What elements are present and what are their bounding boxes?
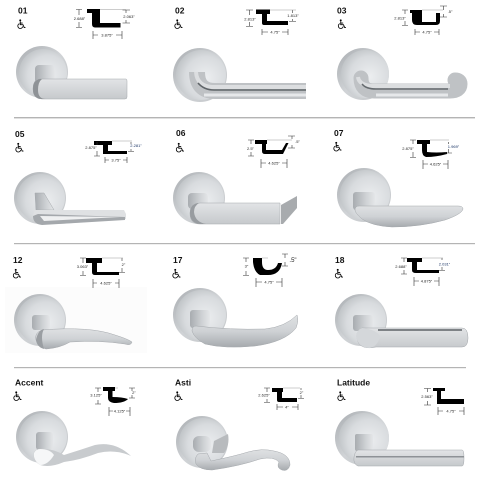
- heading: 02: 02: [175, 6, 185, 16]
- heading: 18: 18: [335, 255, 345, 265]
- profile diagram 05: 3.75": [111, 158, 121, 162]
- profile diagram 17: [243, 254, 297, 287]
- heading: Asti: Asti: [175, 378, 191, 388]
- profile diagram 12: [77, 258, 126, 288]
- profile diagram 12: 2": [122, 262, 126, 267]
- profile diagram 01: [74, 9, 135, 39]
- door lever Asti: [176, 416, 290, 470]
- door lever 18: [335, 294, 468, 348]
- heading: Accent: Accent: [15, 378, 44, 388]
- panel: lever 17: [173, 254, 298, 347]
- profile diagram 02: 1.813": [287, 13, 299, 18]
- heading: 17: 17: [173, 255, 183, 265]
- profile diagram 07: 4.625": [430, 162, 442, 166]
- profile diagram 07: 2.875": [402, 146, 414, 151]
- door lever Accent: [16, 411, 131, 466]
- door lever 02: [173, 48, 306, 102]
- profile diagram 07: [402, 140, 460, 169]
- profile diagram Latitude: 2.563": [421, 394, 433, 399]
- icon: accessible: [176, 143, 184, 152]
- profile diagram 17: 3": [245, 264, 249, 268]
- icon: accessible: [338, 19, 346, 28]
- icon: accessible: [14, 391, 21, 400]
- profile diagram Asti: 2": [300, 390, 304, 395]
- profile diagram Accent: [90, 387, 136, 416]
- profile diagram Accent: 4.125": [114, 408, 126, 414]
- heading: 07: 07: [334, 128, 344, 138]
- heading: 01: 01: [18, 6, 28, 16]
- profile diagram 02: [244, 10, 299, 35]
- profile diagram 12: 3.063": [77, 264, 89, 269]
- profile diagram 05: 2.281": [130, 143, 142, 148]
- panel: lever 03: [337, 6, 460, 100]
- profile diagram 03: 2.813": [394, 16, 406, 20]
- profile diagram 06: .5": [295, 139, 300, 144]
- profile diagram Accent: 3.125": [90, 392, 102, 398]
- profile diagram 18: 4.875": [421, 278, 433, 284]
- icon: accessible: [175, 19, 182, 28]
- profile diagram Asti: 4": [285, 404, 289, 410]
- door lever 12: [14, 294, 132, 349]
- profile diagram 18: 2.031": [439, 262, 451, 266]
- profile diagram Accent: 2": [132, 390, 136, 395]
- heading: 03: 03: [337, 6, 347, 16]
- panel: lever Latitude: [335, 378, 464, 466]
- profile diagram 01: 3.875": [101, 32, 113, 38]
- door lever 07: [337, 168, 463, 227]
- profile diagram 18: 2.688": [395, 264, 407, 269]
- profile diagram 06: 2.5": [247, 146, 255, 151]
- profile diagram 06: [247, 136, 300, 168]
- door lever 05: [14, 172, 126, 225]
- heading: 05: 05: [15, 129, 25, 139]
- icon: accessible: [18, 19, 25, 28]
- panel: lever Accent: [14, 378, 136, 466]
- heading: Latitude: Latitude: [337, 378, 370, 388]
- profile diagram Asti: 2.625": [258, 392, 270, 398]
- profile diagram 01: 2.063": [123, 14, 135, 19]
- profile diagram 05: 2.875": [85, 145, 97, 150]
- icon: accessible: [335, 269, 343, 278]
- door lever 01: [16, 46, 127, 99]
- profile diagram 02: 4.75": [270, 30, 280, 34]
- icon: accessible: [16, 143, 23, 152]
- profile diagram Latitude: [421, 388, 464, 415]
- panel: lever 12: [5, 255, 147, 353]
- panel: lever 05: [14, 129, 142, 225]
- door lever 03: [337, 48, 460, 100]
- profile diagram 01: 2.688": [74, 16, 86, 21]
- profile diagram 17: 4.75": [264, 280, 274, 284]
- image backdrop 12: [5, 287, 147, 353]
- panel: lever 06: [173, 128, 300, 224]
- profile diagram Asti: [258, 388, 304, 410]
- profile diagram 05: [85, 141, 142, 163]
- profile diagram 03: [394, 6, 453, 35]
- profile diagram 03: .5": [448, 9, 453, 14]
- profile diagram Latitude: 4.75": [446, 408, 456, 414]
- icon: accessible: [173, 269, 180, 278]
- door lever Latitude: [335, 411, 464, 466]
- icon: accessible: [13, 269, 21, 278]
- door lever 17: [173, 288, 298, 347]
- panel: lever 01: [16, 6, 135, 99]
- profile diagram 06: 4.625": [268, 160, 280, 166]
- panel: lever 07: [334, 128, 463, 227]
- icon: accessible: [175, 391, 182, 400]
- profile diagram 12: 4.625": [100, 280, 112, 286]
- profile diagram 03: 4.75": [422, 30, 432, 34]
- icon: accessible: [334, 142, 341, 151]
- profile diagram 07: 1.969": [448, 144, 460, 149]
- panel: lever 02: [173, 6, 306, 102]
- panel: lever 18: [335, 255, 468, 348]
- panel: lever Asti: [175, 378, 304, 470]
- door lever 06: [173, 172, 297, 224]
- profile diagram 17: .5": [289, 258, 297, 264]
- icon: accessible: [338, 391, 345, 400]
- heading: 12: 12: [13, 255, 23, 265]
- profile diagram 18: [395, 258, 451, 286]
- heading: 06: 06: [176, 128, 186, 138]
- profile diagram 02: 2.813": [244, 16, 256, 22]
